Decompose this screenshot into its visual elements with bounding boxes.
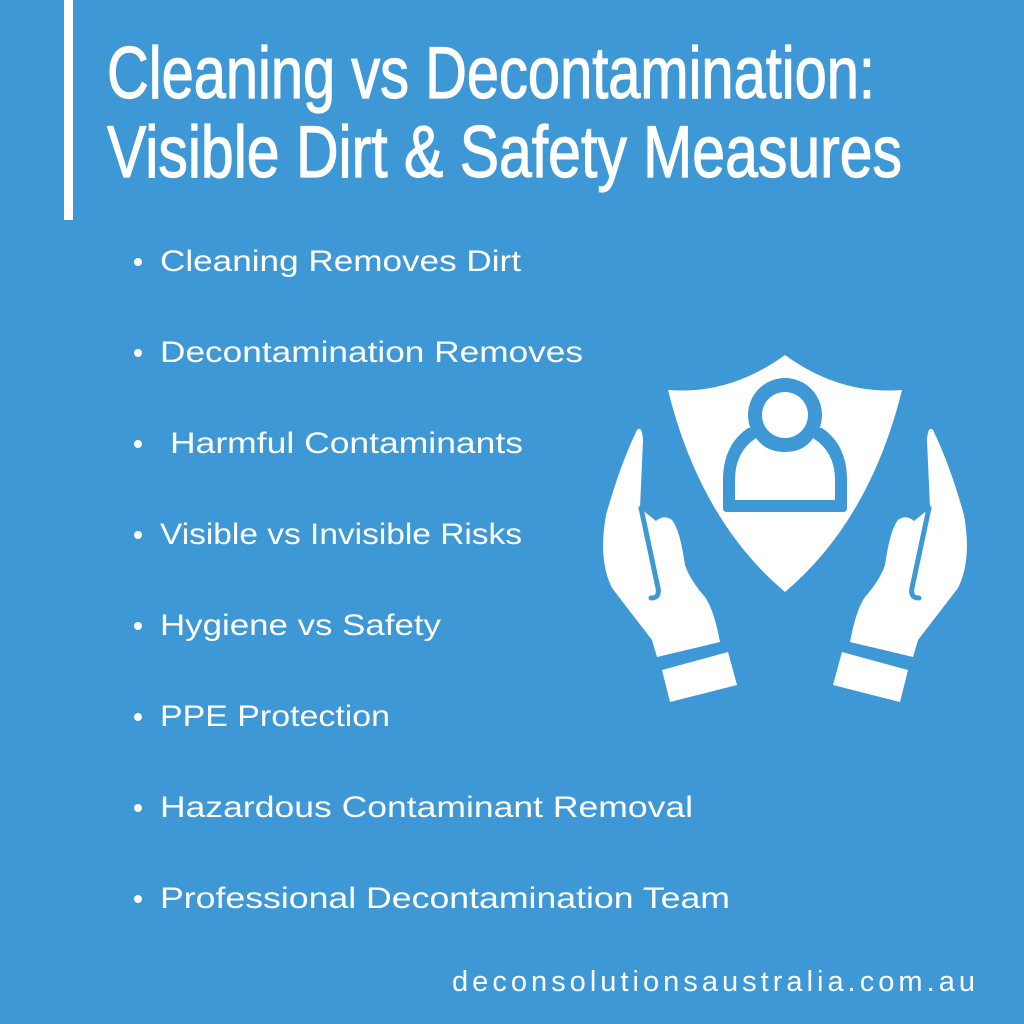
title — [107, 33, 902, 193]
bullet list — [134, 245, 730, 915]
accent bar — [64, 0, 73, 220]
person — [723, 378, 847, 512]
bullet list: PPE Protection — [160, 700, 390, 733]
bullet list: Harmful Contaminants — [170, 427, 523, 460]
bullet list: Cleaning Removes Dirt — [160, 245, 522, 278]
icon: hands protecting shield with person — [603, 355, 967, 702]
bullet list: Professional Decontamination Team — [160, 882, 730, 915]
bullet list: Hygiene vs Safety — [160, 609, 441, 642]
bullet list: Hazardous Contaminant Removal — [160, 791, 693, 824]
bullet list: Decontamination Removes — [160, 336, 583, 369]
shield — [668, 355, 902, 592]
bullet list: Visible vs Invisible Risks — [160, 518, 522, 551]
footer url: deconsolutionsaustralia.com.au — [452, 966, 975, 998]
left hand — [603, 429, 737, 702]
